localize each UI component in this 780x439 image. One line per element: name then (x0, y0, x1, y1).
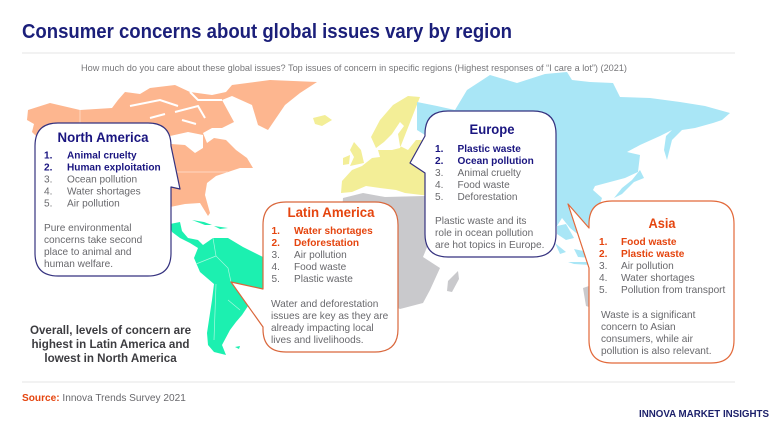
top issues list: Deforestation (458, 192, 518, 203)
map region: North America and Greenland (27, 80, 317, 216)
map region: Asia (417, 72, 730, 265)
overall summary text: Overall, levels of concern are (30, 324, 192, 337)
commentary: pollution is also relevant. (601, 346, 712, 357)
callout: Latin America (231, 202, 398, 352)
top issues list (44, 150, 161, 210)
top issues list: 3. (44, 174, 52, 186)
top issues list: Food waste (621, 237, 677, 248)
top issues list: 1. (272, 226, 280, 237)
commentary: human welfare. (44, 259, 113, 270)
commentary (435, 216, 544, 251)
commentary (601, 310, 712, 357)
top issues list: Animal cruelty (458, 168, 522, 179)
top issues list: Food waste (294, 262, 347, 273)
top issues list: Pollution from transport (621, 285, 726, 296)
commentary: concerns take second (44, 235, 142, 246)
commentary: Water and deforestation (271, 299, 378, 310)
callout: Asia: Asia (648, 215, 676, 231)
top issues list: 2. (599, 249, 608, 260)
callout: North America (35, 123, 180, 276)
commentary: Plastic waste and its (435, 216, 526, 227)
commentary: lives and livelihoods. (271, 335, 364, 346)
top issues list: 5. (44, 198, 52, 210)
footer brand: INNOVA MARKET INSIGHTS (639, 409, 769, 420)
overall summary text (30, 324, 192, 365)
top issues list: 4. (44, 186, 52, 198)
top issues list: Air pollution (294, 250, 347, 261)
top issues list: 5. (599, 285, 607, 296)
commentary: consumers, while air (601, 334, 694, 345)
commentary: already impacting local (271, 323, 374, 334)
top issues list: 1. (435, 144, 444, 155)
commentary: concern to Asian (601, 322, 676, 333)
top issues list: Air pollution (67, 198, 120, 210)
source line: Source: Innova Trends Survey 2021 (22, 393, 186, 404)
top issues list: Water shortages (621, 273, 695, 284)
top issues list: Plastic waste (294, 274, 353, 285)
top issues list: 3. (599, 261, 607, 272)
top issues list: 4. (272, 262, 280, 273)
top issues list: Water shortages (67, 186, 141, 198)
top issues list: 1. (44, 150, 53, 162)
top issues list: 3. (435, 168, 443, 179)
top issues list: 2. (44, 162, 53, 174)
callout: Europe: Europe (470, 121, 515, 137)
top issues list: Ocean pollution (458, 156, 534, 167)
top issues list: 4. (599, 273, 607, 284)
overall summary text: highest in Latin America and (31, 338, 190, 351)
top issues list: Deforestation (294, 238, 359, 249)
top issues list: 2. (435, 156, 444, 167)
commentary: Pure environmental (44, 223, 132, 234)
top issues list: 3. (272, 250, 280, 261)
map region: Africa and Australia (340, 193, 592, 309)
callout: Europe (410, 111, 556, 257)
top issues list: 5. (272, 274, 280, 285)
top issues list: Plastic waste (621, 249, 685, 260)
commentary: role in ocean pollution (435, 228, 533, 239)
top issues list: Animal cruelty (67, 150, 137, 162)
overall summary text: lowest in North America (44, 352, 177, 365)
top issues list: 1. (599, 237, 608, 248)
commentary: are hot topics in Europe. (435, 240, 544, 251)
top issues list: Ocean pollution (67, 174, 137, 186)
callout: North America: North America (58, 129, 149, 145)
top issues list: 5. (435, 192, 443, 203)
subtitle: How much do you care about these global issues? Top issues of concern in specific regions (Highest responses of “I care a lot”) (2021) (81, 63, 627, 74)
top issues list: Human exploitation (67, 162, 161, 174)
commentary (271, 299, 389, 346)
top issues list: Water shortages (294, 226, 373, 237)
top issues list (435, 144, 534, 203)
callout: Latin America: Latin America (288, 204, 375, 220)
commentary: issues are key as they are (271, 311, 389, 322)
top issues list: 4. (435, 180, 443, 191)
top issues list: 2. (272, 238, 280, 249)
commentary: place to animal and (44, 247, 132, 258)
callout: Asia (568, 201, 734, 363)
top issues list: Air pollution (621, 261, 674, 272)
map region: Europe (313, 96, 430, 196)
commentary (44, 223, 142, 270)
commentary: Waste is a significant (601, 310, 696, 321)
top issues list: Plastic waste (458, 144, 521, 155)
top issues list (599, 237, 726, 296)
top issues list (272, 226, 373, 285)
world map (27, 72, 730, 355)
map region: Latin America (170, 220, 264, 355)
top issues list: Food waste (458, 180, 510, 191)
title: Consumer concerns about global issues vary by region (22, 21, 512, 43)
